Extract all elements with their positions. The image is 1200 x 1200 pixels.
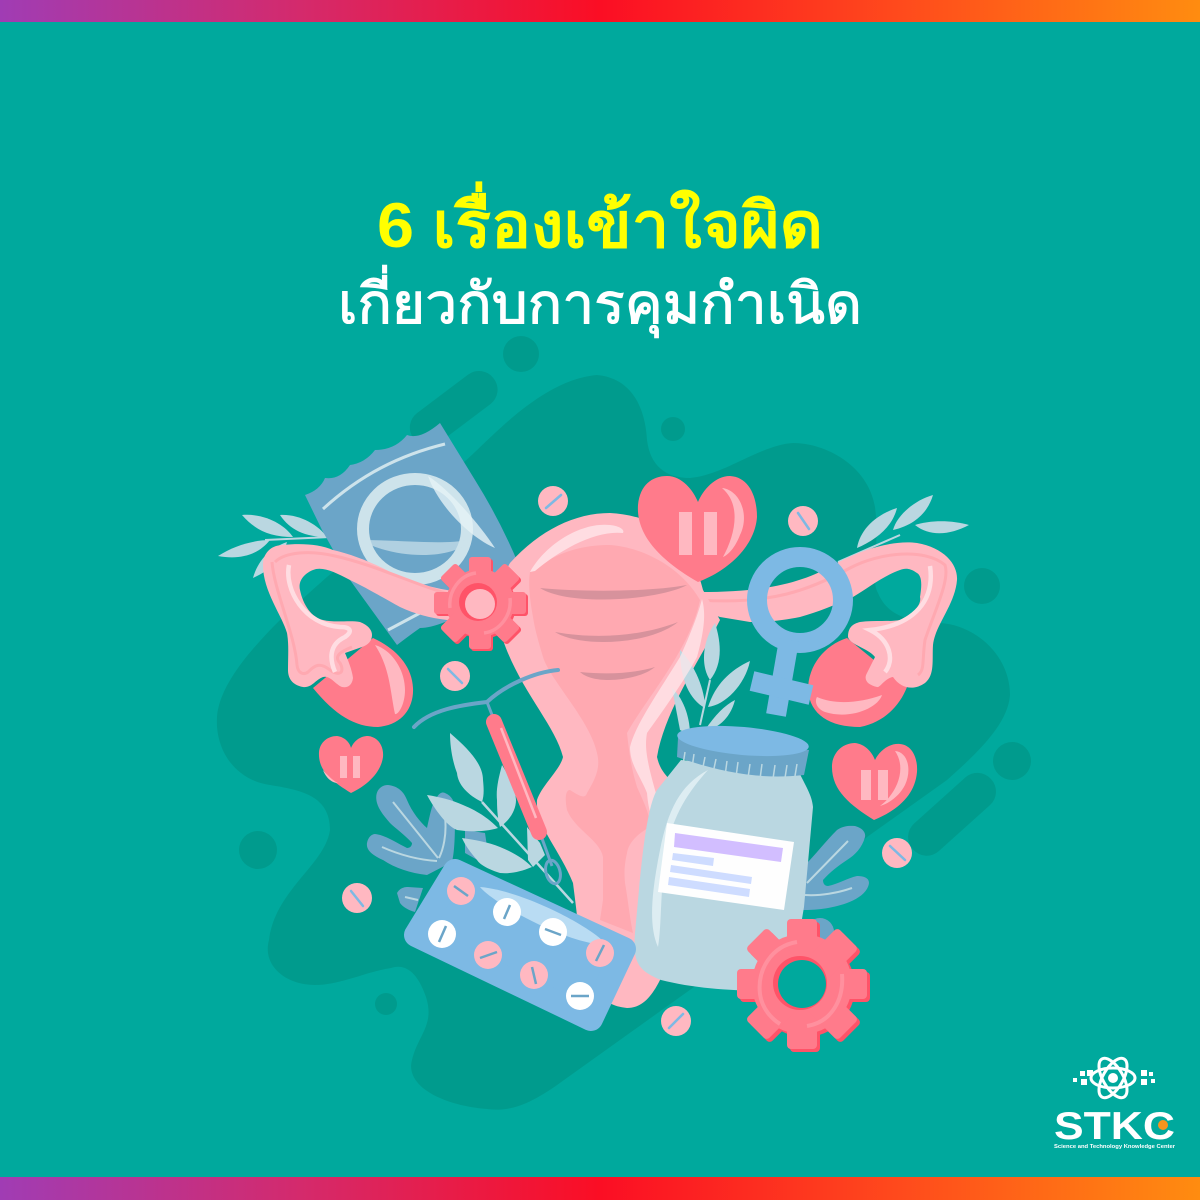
condom packet xyxy=(305,423,518,645)
bottle label xyxy=(658,823,794,910)
right fallopian tube and ovary xyxy=(700,542,957,727)
uterus body xyxy=(499,513,720,1008)
title xyxy=(338,181,862,338)
uterus swirl highlight xyxy=(630,599,704,818)
logo tagline: Science and Technology Knowledge Center xyxy=(1054,1144,1176,1150)
background blob xyxy=(217,336,1031,1110)
leaves: top left xyxy=(218,515,330,578)
leaves behind bottle xyxy=(672,623,750,735)
STKC logo xyxy=(1054,1054,1176,1150)
reproductive system xyxy=(263,513,957,1008)
pills: loose xyxy=(342,486,912,1036)
condom ring xyxy=(363,479,467,579)
logo atom icon xyxy=(1091,1054,1135,1102)
title: เกี่ยวกับการคุมกำเนิด xyxy=(338,265,862,338)
female symbol xyxy=(752,557,843,715)
left fallopian tube and ovary xyxy=(263,544,500,727)
pale foliage near IUD xyxy=(427,733,573,903)
title: 6 เรื่องเข้าใจผิด xyxy=(377,181,823,261)
IUD xyxy=(414,670,563,885)
blister highlight xyxy=(480,887,607,945)
uterus creases xyxy=(540,585,687,680)
small heart right xyxy=(832,743,917,820)
small heart left xyxy=(319,736,383,793)
big heart xyxy=(638,476,757,582)
bottle xyxy=(634,721,813,991)
large gear xyxy=(737,919,870,1052)
uterus highlight xyxy=(530,525,623,572)
bottle cap xyxy=(677,738,809,776)
blue foliage: right xyxy=(803,826,869,946)
bottom gradient bar xyxy=(0,1177,1200,1200)
leaves: top right xyxy=(838,495,969,562)
small gear xyxy=(434,557,528,651)
uterus inner xyxy=(529,545,700,933)
blister pack xyxy=(416,871,624,1019)
logo wordmark: STKC xyxy=(1054,1105,1175,1148)
blue foliage: left xyxy=(367,785,490,912)
top gradient bar xyxy=(0,0,1200,22)
logo pixels xyxy=(1073,1070,1155,1085)
